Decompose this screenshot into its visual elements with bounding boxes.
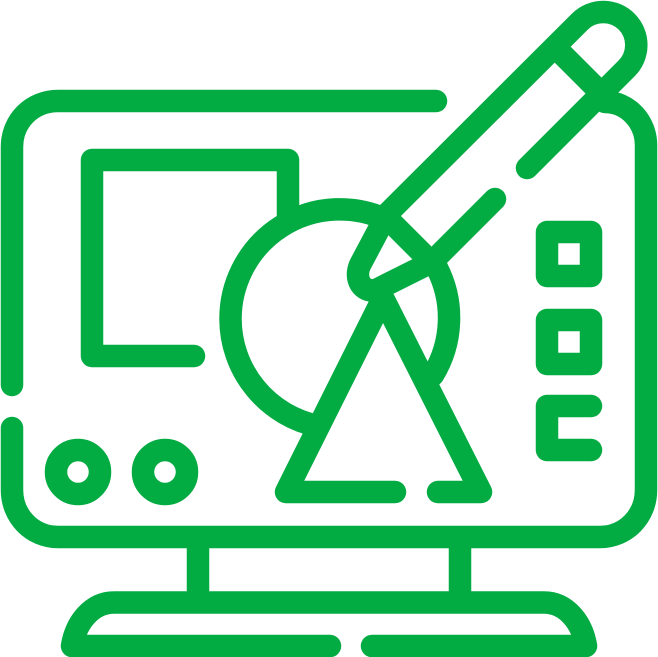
stylus — [358, 12, 636, 290]
monitor frame — [12, 101, 646, 537]
triangle shape — [286, 298, 481, 492]
square shape — [92, 160, 288, 356]
monitor stand — [72, 540, 586, 646]
small dials — [56, 450, 187, 494]
circle shape — [230, 209, 449, 426]
right side buttons — [547, 232, 591, 450]
